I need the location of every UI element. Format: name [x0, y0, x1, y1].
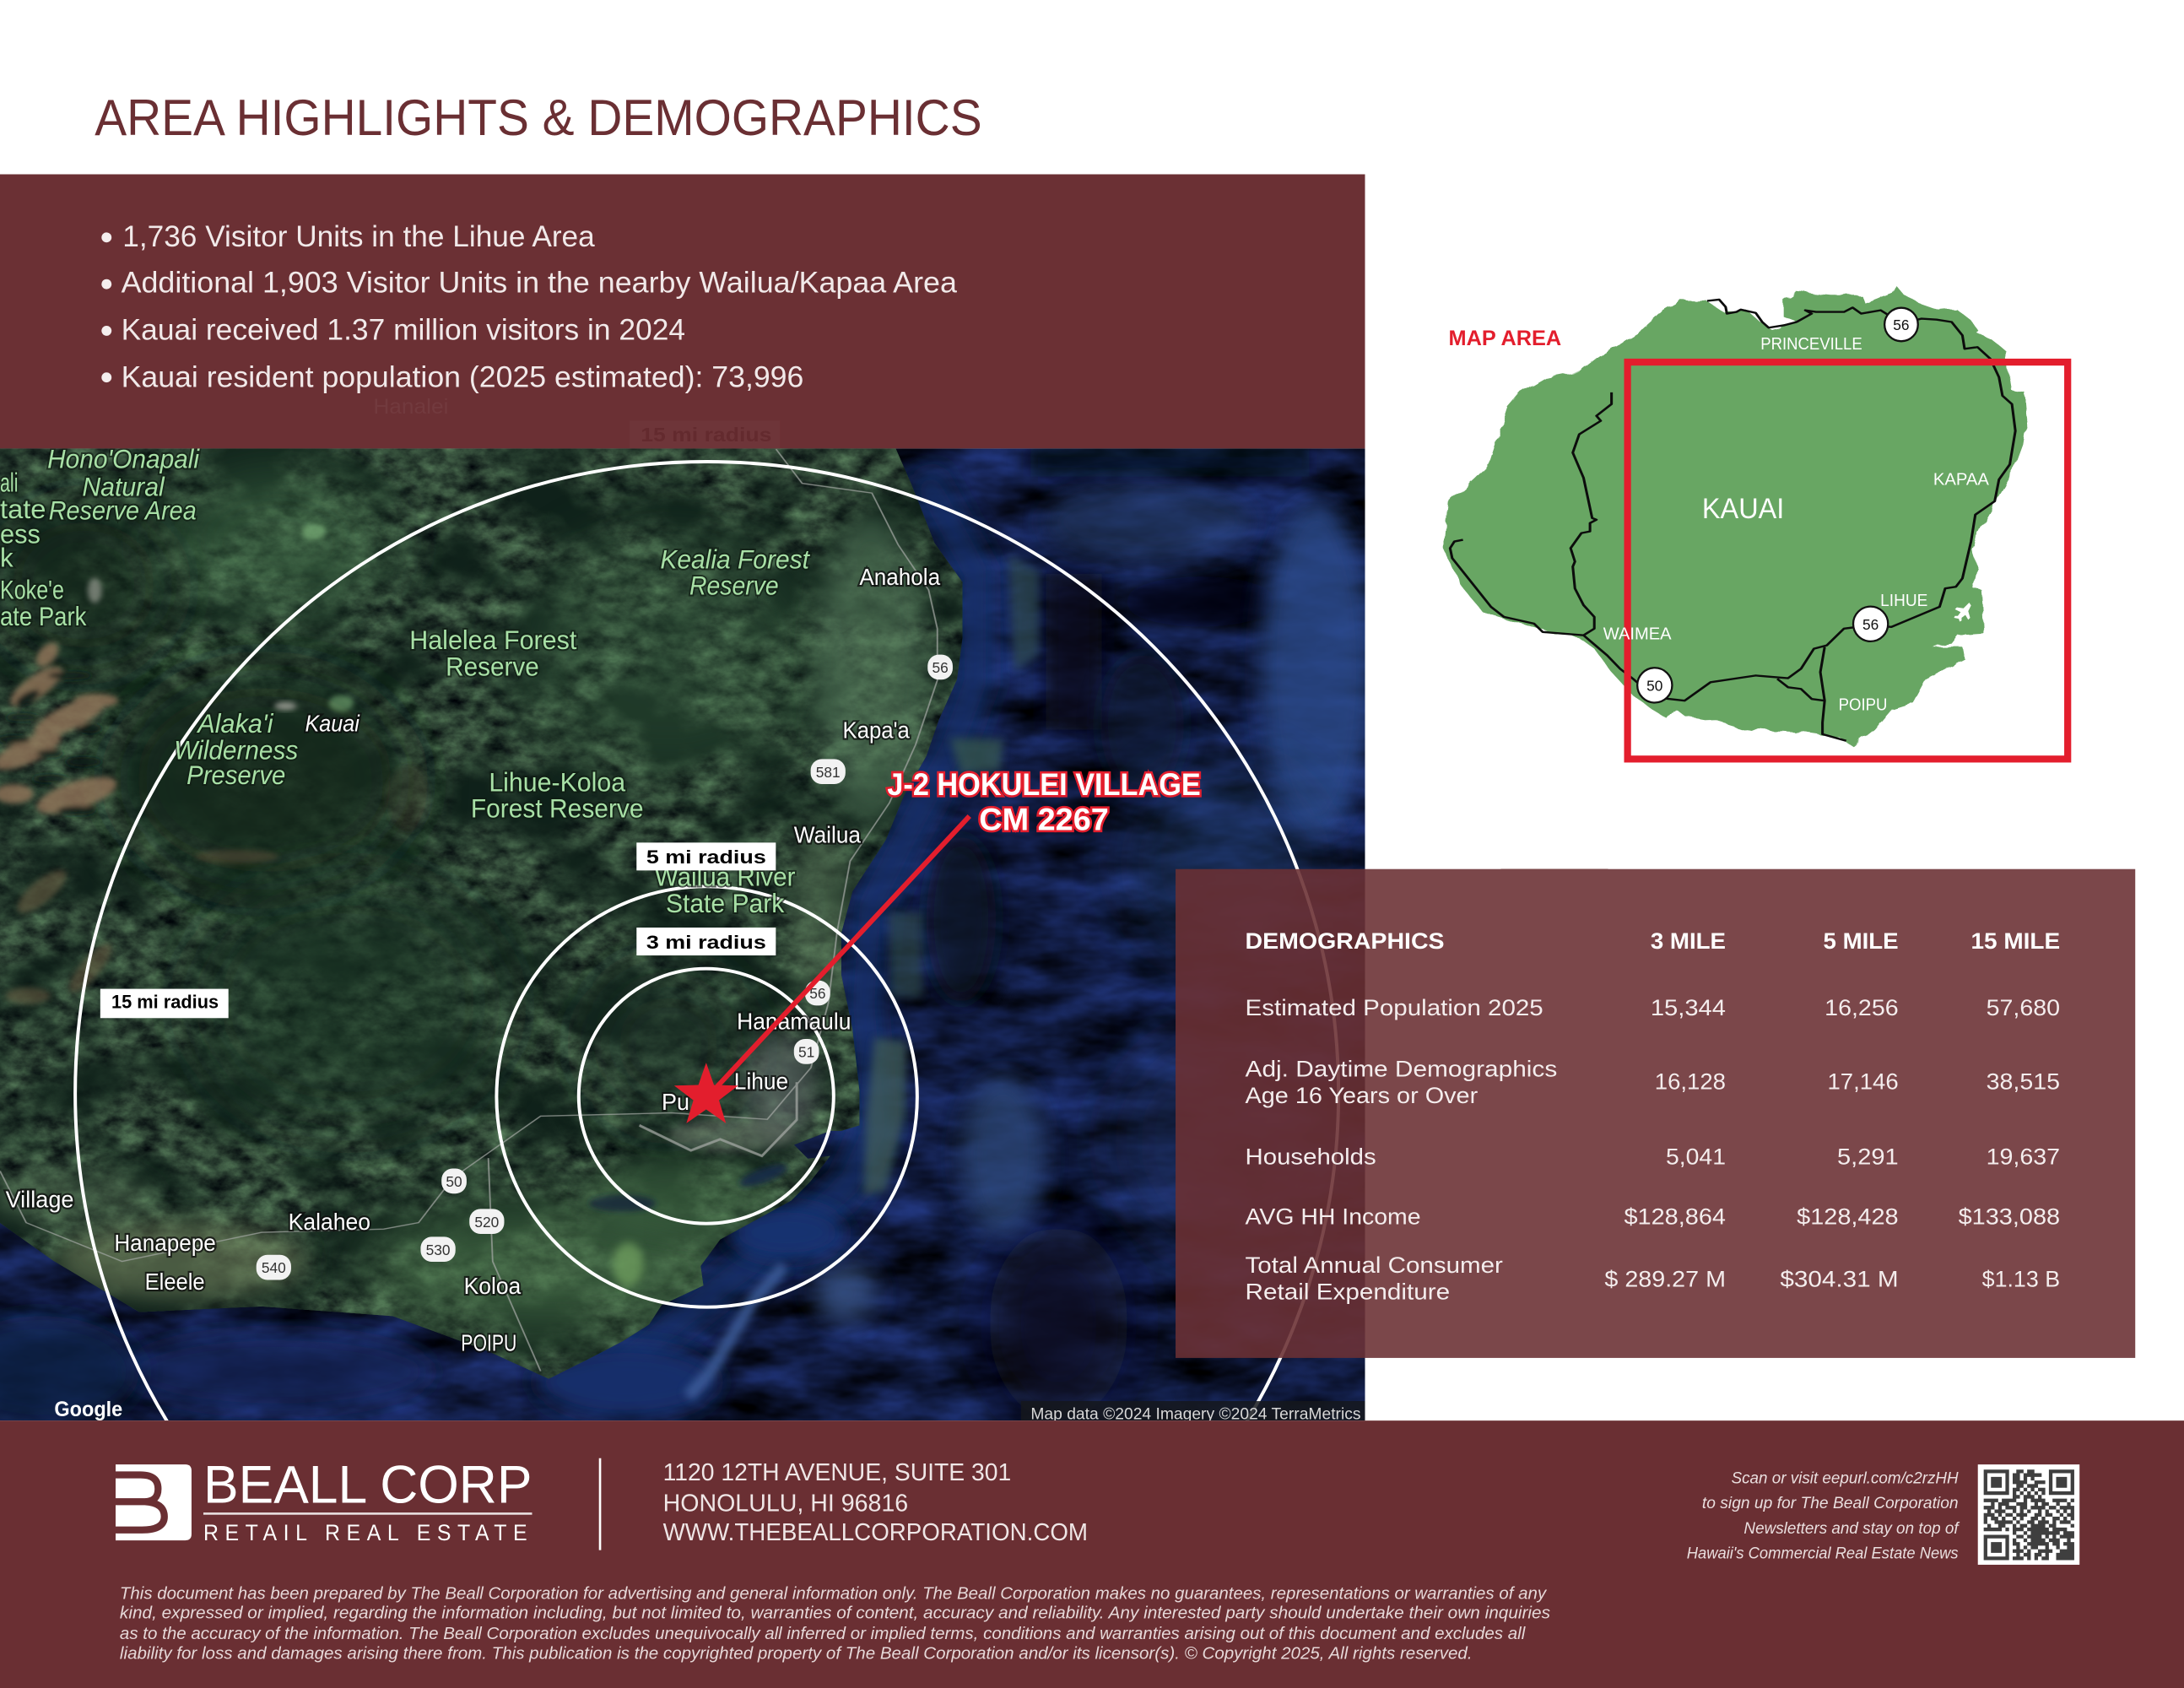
- highway shields: 56: [809, 985, 825, 1002]
- map area box: [1628, 362, 2068, 759]
- row: retail expenditure: $1.13 B: [1982, 1266, 2060, 1292]
- address: [663, 1459, 1088, 1546]
- reef streak: [688, 1266, 784, 1397]
- route 56 south shield: 56: [1862, 616, 1879, 633]
- icon: airplane: [1954, 603, 1971, 621]
- header row: [1246, 928, 2060, 954]
- lighter swell patches: [1261, 501, 1372, 836]
- row: income: [1246, 1203, 2060, 1229]
- QR code: [1978, 1464, 2079, 1565]
- highway shields: [257, 655, 953, 1280]
- place labels: Reserve: [689, 571, 779, 601]
- logo mark: [116, 1464, 192, 1540]
- bullet 3: Kauai received 1.37 million visitors in 2024: [122, 313, 685, 347]
- ghost map labels: 15 mi radius: [641, 424, 771, 446]
- disclaimer: kind, expressed or implied, regarding the information including, but not limited to, warranties of content, accuracy and reliability. Any interested party should undertake their own inquiries: [120, 1604, 1550, 1622]
- place labels: Hanamaulu: [737, 1008, 851, 1034]
- highway shields: 51: [798, 1043, 814, 1060]
- row: retail expenditure: [1246, 1252, 2060, 1305]
- locator map of Kauai: [1444, 285, 2068, 759]
- map data credit: Map data ©2024 Imagery ©2024 TerraMetrics: [1030, 1406, 1361, 1424]
- place labels: Kauai: [305, 710, 360, 736]
- Kauai label: KAUAI: [1702, 493, 1784, 525]
- row: households: 5,291: [1837, 1144, 1899, 1170]
- northwest water sliver: [0, 443, 53, 476]
- 5 mi radius label: 5 mi radius: [646, 847, 766, 868]
- row: population: [1246, 994, 2060, 1020]
- place labels: Kapa'a: [843, 717, 910, 744]
- row: population: Estimated Population 2025: [1246, 994, 1543, 1020]
- place labels: ali: [0, 468, 18, 498]
- logo wordmark: RETAIL REAL ESTATE: [203, 1519, 533, 1545]
- disclaimer: This document has been prepared by The Beall Corporation for advertising and general information only. The Beall Corporation makes no guarantees, representations or warranties of any: [120, 1584, 1548, 1603]
- highway shields: 581: [816, 764, 841, 781]
- row: daytime demographics: 16,128: [1655, 1068, 1726, 1094]
- site callout: J-2 HOKULEI VILLAGE: [887, 766, 1201, 802]
- header row: 15 MILE: [1970, 928, 2060, 954]
- newsletter note: Newsletters and stay on top of: [1743, 1519, 1960, 1538]
- map area label: MAP AREA: [1449, 327, 1561, 350]
- row: retail expenditure: $ 289.27 M: [1604, 1266, 1726, 1292]
- 15 mi radius label: 15 mi radius: [111, 992, 219, 1013]
- reef shelves: [1008, 555, 1039, 671]
- row: income: $133,088: [1959, 1203, 2060, 1229]
- place labels: Koloa: [464, 1273, 522, 1299]
- place labels: Anahola: [859, 564, 940, 590]
- 5 mi radius label: [636, 842, 776, 870]
- 3 mi radius label: [636, 928, 776, 955]
- place labels: Lihue-Koloa: [489, 767, 626, 797]
- Princeville label: PRINCEVILLE: [1760, 334, 1862, 354]
- footer band: [0, 1420, 2184, 1688]
- row: daytime demographics: 17,146: [1827, 1068, 1899, 1094]
- 15 mile ring: [75, 462, 1338, 1688]
- row: income: AVG HH Income: [1246, 1203, 1421, 1229]
- roads: [0, 449, 938, 1372]
- place labels: Wailua: [794, 821, 861, 847]
- highway shields: 540: [262, 1259, 286, 1276]
- place labels: Wilderness: [174, 735, 299, 765]
- row: retail expenditure: Retail Expenditure: [1246, 1279, 1450, 1305]
- island shape: [1444, 285, 2027, 746]
- row: retail expenditure: Total Annual Consumer: [1246, 1252, 1503, 1278]
- row: retail expenditure: $304.31 M: [1780, 1266, 1899, 1292]
- place labels: Kealia Forest: [660, 544, 810, 574]
- row: income: $128,864: [1624, 1203, 1726, 1229]
- place labels: Wailua River: [655, 863, 795, 892]
- gullies and fields: [738, 1163, 788, 1188]
- deep water patches: [1046, 574, 1102, 730]
- island roads: [1450, 300, 2015, 741]
- Poipu label: POIPU: [1839, 695, 1887, 715]
- bullet 1: 1,736 Visitor Units in the Lihue Area: [122, 219, 595, 253]
- place labels: Lihue: [734, 1068, 788, 1094]
- row: daytime demographics: 38,515: [1987, 1068, 2060, 1094]
- town of Lihue: [743, 1033, 816, 1139]
- address: WWW.THEBEALLCORPORATION.COM: [663, 1519, 1088, 1546]
- place labels: Reserve Area: [49, 496, 197, 526]
- bullet 4: Kauai resident population (2025 estimated): 73,996: [122, 360, 803, 394]
- place labels: ess: [0, 520, 41, 549]
- header row: 5 MILE: [1824, 928, 1899, 954]
- row: daytime demographics: Adj. Daytime Demographics: [1246, 1056, 1557, 1082]
- row: population: 16,256: [1825, 994, 1899, 1020]
- logo wordmark: [203, 1456, 533, 1545]
- newsletter note: Hawaii's Commercial Real Estate News: [1687, 1545, 1959, 1563]
- logo wordmark: BEALL CORP: [203, 1456, 532, 1515]
- row: income: $128,428: [1797, 1203, 1899, 1229]
- row: households: 5,041: [1666, 1144, 1726, 1170]
- highway shields: 530: [426, 1242, 451, 1258]
- 5 mile ring: [496, 886, 917, 1307]
- row: population: 15,344: [1651, 994, 1726, 1020]
- row: daytime demographics: Age 16 Years or Over: [1246, 1082, 1478, 1108]
- place labels: Pu: [662, 1089, 689, 1115]
- place labels: Alaka'i: [196, 709, 274, 738]
- footer divider: [599, 1458, 601, 1550]
- place labels: Koke'e: [0, 576, 64, 605]
- ghost map labels: [373, 396, 780, 448]
- land: [0, 448, 962, 1379]
- route 50 shield: 50: [1646, 677, 1662, 694]
- route 56 north shield: [1884, 308, 1918, 341]
- ghost map labels: Hanalei: [373, 396, 448, 419]
- row: population: 57,680: [1987, 994, 2060, 1020]
- brown ridges: [0, 639, 430, 1004]
- address: HONOLULU, HI 96816: [663, 1490, 908, 1517]
- google credit: Google: [54, 1399, 122, 1421]
- place labels: Halelea Forest: [409, 625, 577, 655]
- bullet 2: Additional 1,903 Visitor Units in the nearby Wailua/Kapaa Area: [122, 266, 957, 300]
- disclaimer: as to the accuracy of the information. The Beall Corporation excludes unequivocally all inferred or implied terms, conditions and warranties arising out of this document and excludes all: [120, 1625, 1526, 1643]
- 15 mi radius label: [100, 989, 229, 1018]
- route 50 shield: [1637, 668, 1672, 703]
- place labels: Forest Reserve: [471, 794, 644, 824]
- near-shore blue: [613, 473, 975, 1372]
- place labels: tate: [0, 495, 46, 524]
- highway shields: 50: [446, 1173, 462, 1190]
- disclaimer: [120, 1584, 1550, 1663]
- place labels: k: [0, 544, 14, 573]
- newsletter note: [1687, 1469, 1960, 1563]
- site callout: [887, 766, 1201, 836]
- bullet dots: [101, 232, 111, 382]
- disclaimer: liability for loss and damages arising there from. This publication is the copyrighted property of The Beall Corporation and/or its licensor(s). © Copyright 2025, All rights reserved.: [120, 1644, 1473, 1663]
- radius rings: [73, 460, 1340, 1420]
- ocean: [0, 443, 1372, 1427]
- tone zones: [118, 668, 411, 891]
- place labels: Natural: [82, 472, 165, 501]
- highway shields: 56: [932, 659, 949, 676]
- place labels: Kalaheo: [289, 1209, 370, 1235]
- place labels: ate Park: [0, 602, 87, 631]
- row: daytime demographics: [1246, 1056, 2060, 1108]
- panel: demographics table: [1176, 869, 2135, 1358]
- satellite map of southeast Kauai: [0, 432, 1372, 1688]
- title: AREA HIGHLIGHTS & DEMOGRAPHICS: [95, 89, 982, 146]
- Lihue label: LIHUE: [1880, 591, 1927, 610]
- place labels: Hono'Onapali: [47, 444, 200, 473]
- Waimea label: WAIMEA: [1603, 624, 1672, 643]
- route 56 north shield: 56: [1893, 316, 1910, 333]
- place labels: State Park: [666, 889, 785, 918]
- arrow to site: [717, 816, 970, 1086]
- header row: DEMOGRAPHICS: [1246, 928, 1445, 954]
- highway shields: 520: [474, 1214, 499, 1231]
- route 56 south shield: [1853, 607, 1888, 641]
- place labels: [0, 444, 940, 1356]
- site star marker: [674, 1063, 738, 1123]
- panel: highlights: [0, 174, 1365, 448]
- row: households: Households: [1246, 1144, 1376, 1170]
- place labels: Preserve: [187, 760, 285, 790]
- row: households: [1246, 1144, 2060, 1170]
- row: households: 19,637: [1987, 1144, 2060, 1170]
- place labels: Eleele: [145, 1269, 205, 1295]
- place labels: Village: [6, 1187, 73, 1213]
- newsletter note: to sign up for The Beall Corporation: [1702, 1494, 1959, 1512]
- address: 1120 12TH AVENUE, SUITE 301: [663, 1459, 1011, 1486]
- 3 mi radius label: 3 mi radius: [646, 932, 766, 953]
- newsletter note: Scan or visit eepurl.com/c2rzHH: [1732, 1469, 1959, 1487]
- place labels: POIPU: [461, 1330, 516, 1356]
- header row: 3 MILE: [1651, 928, 1726, 954]
- 3 mile ring: [579, 969, 834, 1224]
- place labels: Hanapepe: [114, 1230, 216, 1256]
- Kapaa label: KAPAA: [1933, 469, 1989, 489]
- site callout: CM 2267: [979, 802, 1109, 836]
- place labels: Reserve: [446, 652, 539, 681]
